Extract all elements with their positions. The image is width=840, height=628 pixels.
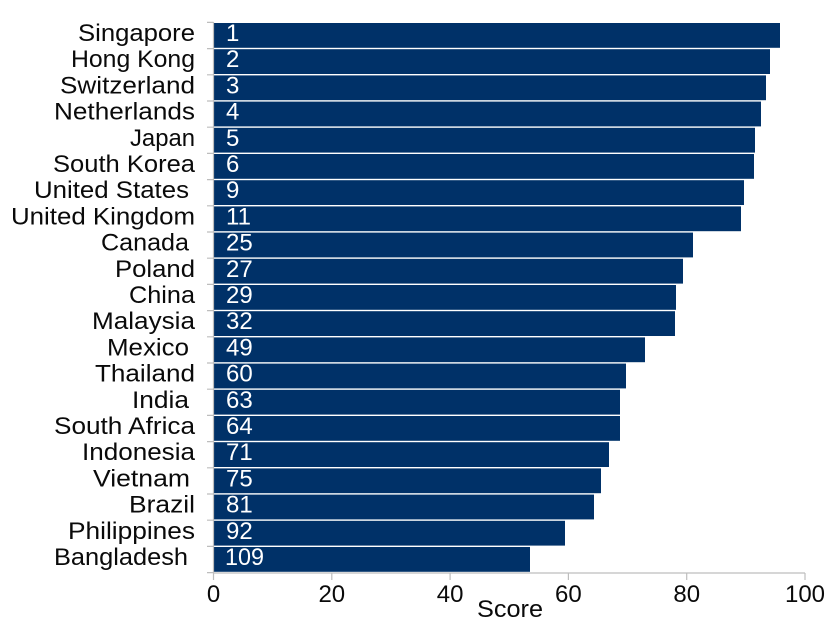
country labels: India <box>132 387 190 414</box>
x-axis tick labels <box>207 581 825 608</box>
country labels: South Africa <box>54 413 196 440</box>
country labels: United Kingdom <box>11 203 195 230</box>
x-axis tick labels: 40 <box>437 581 463 608</box>
rank numbers: 92 <box>226 518 253 545</box>
rank numbers: 49 <box>226 334 253 361</box>
rank numbers: 64 <box>226 413 253 440</box>
country labels: Hong Kong <box>71 46 195 73</box>
rank numbers: 11 <box>226 203 251 230</box>
country labels: China <box>129 282 196 309</box>
rank numbers: 9 <box>226 177 239 204</box>
rank numbers: 32 <box>226 308 253 335</box>
rank numbers: 63 <box>226 387 253 414</box>
rank numbers: 71 <box>226 439 253 466</box>
country labels: Vietnam <box>93 465 190 492</box>
x-axis title: Score <box>477 596 543 623</box>
country labels: United States <box>34 177 189 204</box>
x-axis tick labels: 20 <box>318 581 345 608</box>
rank numbers: 81 <box>226 492 253 519</box>
rank numbers: 75 <box>226 465 253 492</box>
country labels: Netherlands <box>54 99 195 126</box>
rank numbers: 4 <box>226 99 239 126</box>
country labels: Singapore <box>78 20 195 47</box>
rank numbers: 2 <box>226 46 239 73</box>
country labels: Japan <box>130 125 195 152</box>
country labels: South Korea <box>53 151 196 178</box>
country labels: Indonesia <box>82 439 196 466</box>
rank numbers <box>225 20 264 571</box>
x-axis tick labels: 100 <box>785 581 825 608</box>
rank numbers: 60 <box>226 361 253 388</box>
rank numbers: 1 <box>226 20 239 47</box>
rank numbers: 29 <box>226 282 253 309</box>
rank numbers: 109 <box>225 544 264 571</box>
rank numbers: 5 <box>226 125 239 152</box>
country labels: Philippines <box>68 518 195 545</box>
rank numbers: 6 <box>226 151 239 178</box>
x-axis tick labels: 80 <box>673 581 700 608</box>
rank numbers: 25 <box>226 230 253 257</box>
country labels: Canada <box>101 230 190 257</box>
x-axis tick labels: 60 <box>555 581 582 608</box>
country labels: Thailand <box>95 361 195 388</box>
country labels: Mexico <box>107 334 189 361</box>
rank numbers: 27 <box>226 256 253 283</box>
country labels <box>11 20 196 571</box>
country labels: Switzerland <box>60 72 195 99</box>
rank numbers: 3 <box>226 72 239 99</box>
x-axis tick labels: 0 <box>207 581 220 608</box>
country labels: Bangladesh <box>54 544 188 571</box>
country labels: Brazil <box>129 492 195 519</box>
bars <box>214 23 780 572</box>
country labels: Poland <box>115 256 195 283</box>
country labels: Malaysia <box>92 308 196 335</box>
